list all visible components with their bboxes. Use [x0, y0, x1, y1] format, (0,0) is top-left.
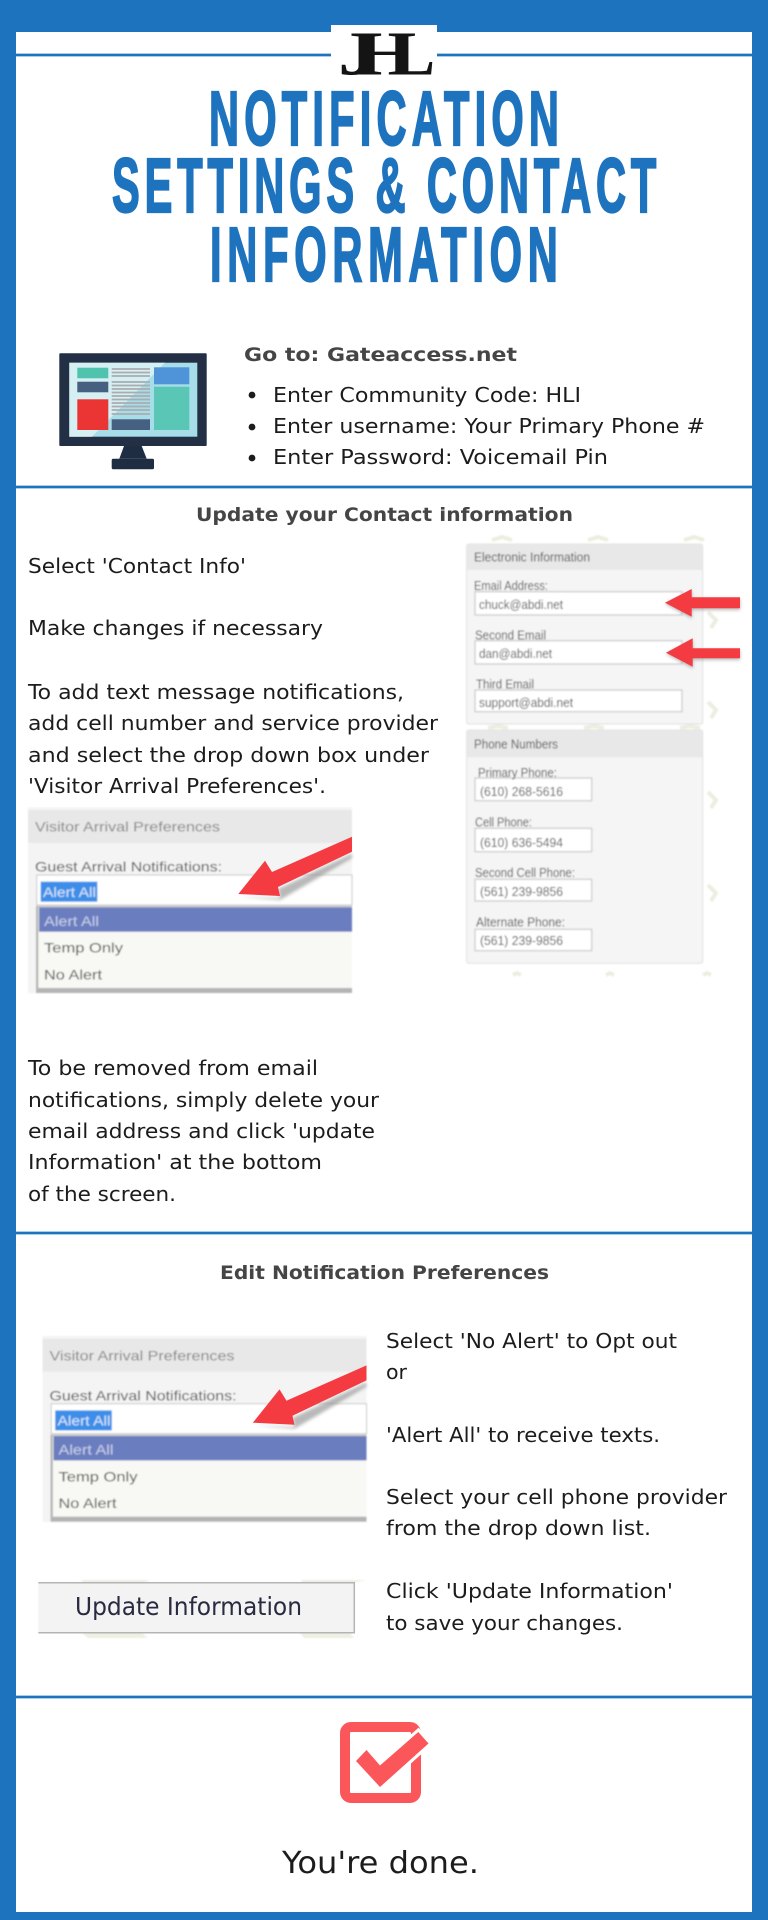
- screenshot: visitor arrival preferences: Alert All: [44, 913, 99, 929]
- screenshot: visitor arrival preferences: Visitor Arrival Preferences: [35, 819, 220, 835]
- icon: red checkbox: [345, 1727, 428, 1798]
- screenshot: notification preferences dropdown: Alert All: [58, 1442, 114, 1458]
- text: preference steps: 'Alert All' to receive texts.: [386, 1423, 660, 1447]
- login instructions: Enter Community Code: HLI: [273, 383, 581, 407]
- logo: JHL: H: [355, 20, 415, 88]
- title: NOTIFICATION: [209, 77, 559, 162]
- text: contact steps: add cell number and service provider: [28, 711, 439, 735]
- login instructions: Go to: Gateaccess.net: [244, 344, 517, 366]
- text: removal instructions: Information' at the bottom: [28, 1150, 322, 1174]
- text: contact steps: 'Visitor Arrival Preferences'.: [28, 774, 326, 798]
- screenshot: contact form: Email Address:: [474, 579, 548, 593]
- button: update information: Update Information: [75, 1592, 302, 1621]
- text: removal instructions: email address and click 'update: [28, 1119, 375, 1143]
- screenshot: visitor arrival preferences: [28, 807, 352, 993]
- text: contact steps: and select the drop down box under: [28, 743, 430, 767]
- screenshot: notification preferences dropdown: Visitor Arrival Preferences: [50, 1347, 234, 1363]
- screenshot: contact form: (561) 239-9856: [480, 934, 563, 948]
- text: removal instructions: of the screen.: [28, 1182, 176, 1206]
- arrow: notification dropdown: [253, 1365, 366, 1429]
- logo: JHL: J: [338, 20, 380, 88]
- screenshot: contact form: Second Cell Phone:: [475, 866, 575, 880]
- arrow: guest arrival dropdown: [238, 837, 352, 900]
- text: preference steps: [386, 1329, 728, 1635]
- text: contact steps: [27, 554, 439, 798]
- arrow: email address: [665, 589, 740, 618]
- login instructions: [244, 344, 705, 469]
- screenshot: contact form: Primary Phone:: [478, 766, 557, 780]
- screenshot: contact form: Phone Numbers: [474, 738, 558, 752]
- screenshot: visitor arrival preferences: Temp Only: [44, 940, 123, 956]
- title: INFORMATION: [210, 213, 558, 298]
- text: contact steps: Make changes if necessary: [28, 616, 323, 640]
- text: contact steps: To add text message notifications,: [27, 680, 404, 704]
- text: contact steps: Select 'Contact Info': [28, 554, 246, 578]
- screenshot: notification preferences dropdown: No Alert: [58, 1495, 117, 1511]
- screenshot: notification preferences dropdown: Temp Only: [58, 1468, 138, 1484]
- text: preference steps: or: [386, 1360, 408, 1384]
- screenshot: contact form: [467, 537, 716, 975]
- screenshot: notification preferences dropdown: Guest Arrival Notifications:: [50, 1387, 236, 1403]
- text: preference steps: to save your changes.: [386, 1611, 623, 1635]
- closing message: You're done.: [281, 1846, 479, 1881]
- screenshot: visitor arrival preferences: Alert All: [43, 884, 96, 900]
- text: removal instructions: To be removed from email: [27, 1056, 318, 1080]
- title: SETTINGS & CONTACT: [112, 144, 656, 229]
- screenshot: visitor arrival preferences: No Alert: [44, 966, 102, 982]
- icon: computer monitor: [59, 353, 207, 469]
- screenshot: contact form: (561) 239-9856: [480, 885, 563, 899]
- screenshot: contact form: (610) 636-5494: [480, 836, 563, 850]
- text: preference steps: Select your cell phone provider: [386, 1485, 728, 1509]
- logo: JHL: L: [392, 20, 435, 88]
- heading: edit notification preferences: Edit Notification Preferences: [220, 1262, 549, 1284]
- screenshot: visitor arrival preferences: Guest Arrival Notifications:: [35, 859, 222, 875]
- text: removal instructions: notifications, simply delete your: [28, 1088, 380, 1112]
- login instructions: Enter Password: Voicemail Pin: [273, 445, 608, 469]
- screenshot: notification preferences dropdown: Alert All: [58, 1413, 110, 1429]
- screenshot: contact form: Third Email: [476, 678, 534, 692]
- screenshot: contact form: Electronic Information: [474, 551, 590, 565]
- screenshot: contact form: Alternate Phone:: [476, 916, 565, 930]
- text: removal instructions: [27, 1056, 380, 1206]
- screenshot: contact form: Second Email: [475, 628, 546, 642]
- screenshot: contact form: (610) 268-5616: [480, 785, 563, 799]
- screenshot: contact form: support@abdi.net: [479, 696, 573, 710]
- text: preference steps: Select 'No Alert' to Opt out: [386, 1329, 677, 1353]
- screenshot: notification preferences dropdown: [42, 1336, 366, 1522]
- logo: JHL: [331, 20, 437, 88]
- screenshot: contact form: chuck@abdi.net: [479, 598, 563, 612]
- screenshot: contact form: Cell Phone:: [475, 816, 532, 830]
- heading: update contact information: Update your Contact information: [196, 504, 573, 526]
- title: [112, 77, 656, 298]
- text: preference steps: from the drop down list.: [386, 1516, 651, 1540]
- login instructions: Enter username: Your Primary Phone #: [273, 414, 705, 438]
- text: preference steps: Click 'Update Information': [386, 1579, 673, 1603]
- screenshot: contact form: dan@abdi.net: [479, 647, 552, 661]
- arrow: second email: [666, 638, 740, 668]
- button: update information: [38, 1580, 366, 1638]
